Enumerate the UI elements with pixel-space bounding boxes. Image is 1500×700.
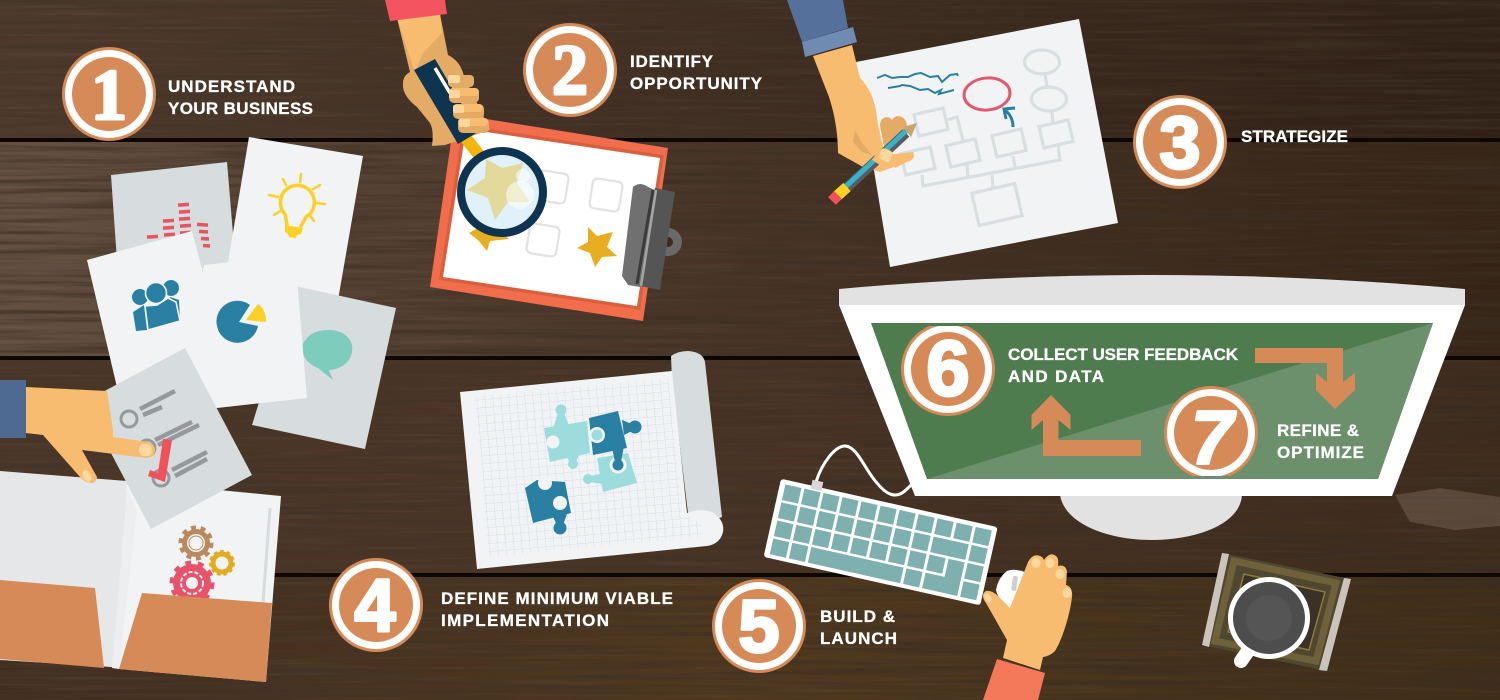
- step 2 label: IDENTIFY: [630, 52, 714, 71]
- keyboard cable: [816, 446, 912, 495]
- step 6 label: COLLECT USER FEEDBACK: [1008, 345, 1239, 364]
- blue scribbles: [877, 73, 958, 94]
- step 1 badge: [62, 47, 156, 141]
- step 7 label: REFINE &: [1277, 421, 1359, 440]
- folder with gears: [0, 471, 281, 682]
- hand on mouse: [983, 554, 1072, 700]
- hand pointing: [0, 380, 155, 483]
- step 5 label: [820, 607, 897, 648]
- hand drawing with pencil: [787, 0, 917, 201]
- mouse: [996, 570, 1028, 609]
- step 6 label: AND DATA: [1008, 367, 1104, 386]
- step 5 badge: 5: [738, 585, 780, 668]
- clipboard clip: [622, 184, 682, 290]
- step 1 label: UNDERSTAND: [168, 77, 295, 96]
- step 7 label: [1277, 421, 1364, 462]
- step 4 label: IMPLEMENTATION: [441, 611, 609, 630]
- step 3 badge: 3: [1159, 101, 1201, 184]
- red circle highlight: [963, 76, 1011, 112]
- icon: red check mark: [148, 439, 172, 482]
- step 6 badge: 6: [926, 324, 970, 412]
- step 7 badge: 7: [1191, 396, 1237, 481]
- paper: bar chart: [111, 162, 236, 275]
- step 2 label: [630, 52, 763, 93]
- arrow: step 6 to step 7: [1255, 348, 1355, 409]
- keyboard: [764, 473, 999, 605]
- step 6 label: [1008, 345, 1239, 386]
- rug under coffee cup: [1202, 553, 1351, 671]
- rolled graph paper: [460, 351, 723, 569]
- icon: pencil: [832, 123, 917, 201]
- step 2 badge: [523, 23, 617, 117]
- step 7 badge: [1164, 386, 1258, 481]
- step 1 badge: 1: [91, 55, 127, 135]
- step 7 label: OPTIMIZE: [1277, 443, 1364, 462]
- icon: gold stars: [469, 222, 617, 267]
- paper: team: [87, 231, 222, 400]
- hand holding magnifier: [385, 0, 490, 146]
- step 5 badge: [712, 579, 806, 673]
- step 4 label: DEFINE MINIMUM VIABLE: [441, 589, 673, 608]
- step 5 label: BUILD &: [820, 607, 895, 626]
- paper: flowchart sketch: [856, 19, 1118, 267]
- paper: lightbulb: [225, 137, 363, 300]
- step 3 badge: [1133, 95, 1227, 189]
- icon: puzzle pieces: [525, 404, 642, 534]
- step 2 badge: 2: [552, 30, 588, 110]
- step 5 label: LAUNCH: [820, 629, 897, 648]
- step 4 badge: 4: [354, 564, 396, 647]
- step 2 label: OPPORTUNITY: [630, 74, 763, 93]
- monitor: [839, 275, 1465, 540]
- magnifying glass: [457, 137, 547, 237]
- checklist paper: [84, 348, 252, 529]
- step 4 label: [441, 589, 673, 630]
- icon: gears: [172, 528, 234, 604]
- paper: pie chart: [180, 255, 307, 408]
- clipboard: [430, 114, 682, 321]
- arrow: step 7 to step 6: [1032, 395, 1141, 456]
- icon: blue arrow: [1004, 108, 1015, 127]
- step 1 label: [168, 77, 313, 118]
- step 1 label: YOUR BUSINESS: [168, 99, 313, 118]
- step 4 badge: [329, 558, 423, 652]
- paper: speech bubble: [252, 286, 396, 449]
- step 6 badge: [901, 322, 995, 416]
- step 3 label: STRATEGIZE: [1241, 127, 1348, 146]
- coffee cup: [1228, 577, 1310, 661]
